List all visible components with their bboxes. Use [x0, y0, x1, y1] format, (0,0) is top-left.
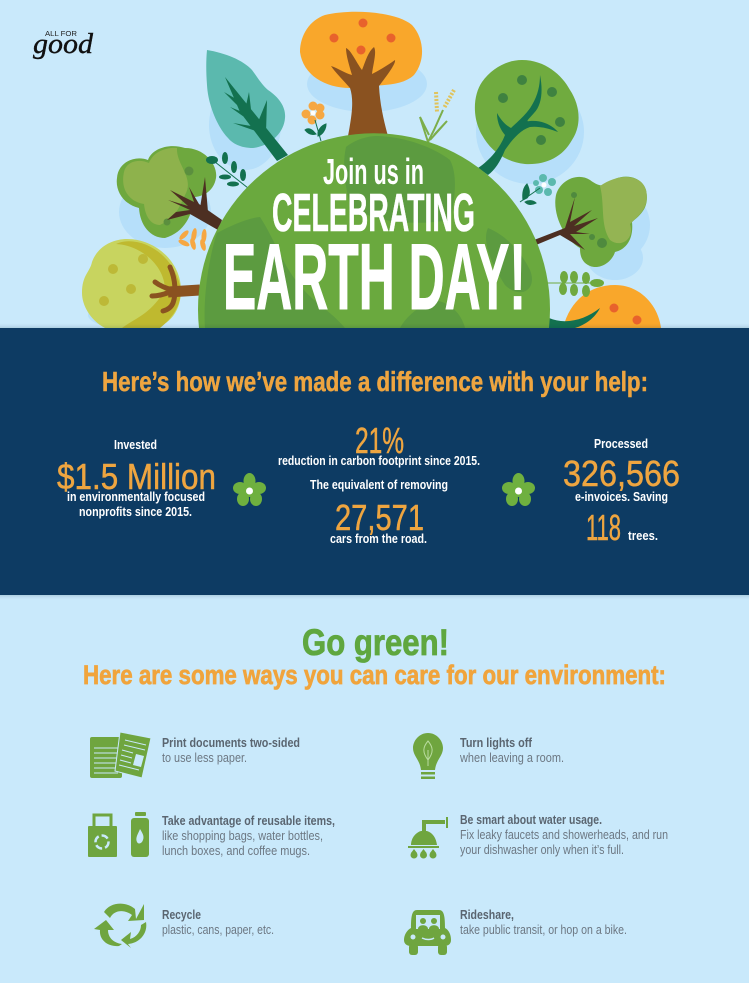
tree: orange bottom right — [549, 285, 661, 328]
stat: carbon reduction and cars: 21% — [355, 420, 404, 461]
tip: water usage: Be smart about water usage. — [460, 812, 602, 827]
icon: light bulb — [413, 733, 443, 779]
icon: bag and bottle — [88, 812, 149, 857]
tip: rideshare: take public transit, or hop on a bike. — [460, 922, 627, 937]
tip: reusable items: lunch boxes, and coffee mugs. — [162, 843, 310, 858]
stat: carbon reduction and cars: The equivalent of removing — [310, 478, 448, 492]
tip: lights off: Turn lights off — [460, 735, 533, 750]
stat: carbon reduction and cars: reduction in carbon footprint since 2015. — [278, 454, 480, 468]
stat: invested: nonprofits since 2015. — [79, 505, 192, 519]
tip: rideshare: Rideshare, — [460, 907, 514, 922]
tree: round green right — [475, 60, 579, 175]
logo: ALL FOR — [45, 31, 77, 38]
tip: reusable items: like shopping bags, water bottles, — [162, 828, 323, 843]
tip: print two-sided — [90, 732, 300, 778]
sprigs and flowers — [178, 90, 604, 297]
stat: carbon reduction and cars: cars from the road. — [330, 532, 427, 546]
tree: orange top — [300, 12, 422, 136]
tip: recycle: Recycle — [162, 907, 201, 922]
icon: documents — [90, 732, 151, 778]
stat: carbon reduction and cars: 27,571 — [335, 497, 424, 538]
tip: recycle: plastic, cans, paper, etc. — [162, 922, 274, 937]
globe — [198, 133, 550, 328]
icon: green flower — [233, 473, 266, 506]
panel: impact stats — [0, 328, 749, 595]
icon: shower head — [408, 817, 448, 858]
stat: e-invoices and trees — [563, 437, 680, 548]
icon: green flower — [502, 473, 535, 506]
tip: reusable items — [88, 812, 335, 858]
heading: go green: Go green! — [302, 622, 449, 663]
icon: car — [404, 910, 451, 955]
logo: good — [33, 28, 94, 60]
shadow blobs — [88, 56, 650, 329]
stat: e-invoices and trees: trees. — [628, 529, 658, 543]
tip: print two-sided: to use less paper. — [162, 750, 247, 765]
illustration: Earth Day globe and trees — [82, 12, 661, 329]
stat: invested: Invested — [114, 438, 157, 452]
title: Join us in — [323, 151, 424, 192]
tip: water usage: your dishwasher only when it’s full. — [460, 842, 624, 857]
title: CELEBRATING — [272, 183, 475, 243]
tree: bushy left — [117, 146, 222, 238]
tip: recycle — [94, 904, 274, 948]
tip: water usage — [408, 812, 668, 858]
title — [223, 151, 526, 329]
tip: rideshare — [404, 907, 627, 955]
stat: e-invoices and trees: Processed — [594, 437, 648, 451]
tip: reusable items: Take advantage of reusable items, — [162, 813, 335, 828]
stat: carbon reduction and cars — [278, 420, 480, 546]
tip: lights off: when leaving a room. — [459, 750, 564, 765]
tip: water usage: Fix leaky faucets and showerheads, and run — [460, 827, 668, 842]
tree: bushy right — [534, 177, 647, 267]
stat: e-invoices and trees: e-invoices. Saving — [575, 490, 668, 504]
tree: yellow-green left — [82, 239, 200, 328]
stat: e-invoices and trees: 118 — [586, 507, 621, 548]
stat: invested: $1.5 Million — [57, 456, 216, 497]
stat: invested — [57, 438, 216, 519]
icon: teal leaf — [206, 50, 288, 161]
stat: invested: in environmentally focused — [67, 490, 205, 504]
tip: print two-sided: Print documents two-sided — [162, 735, 300, 750]
tip: lights off — [413, 733, 564, 779]
icon: recycle arrows — [94, 904, 146, 948]
stat: e-invoices and trees: 326,566 — [563, 453, 680, 494]
